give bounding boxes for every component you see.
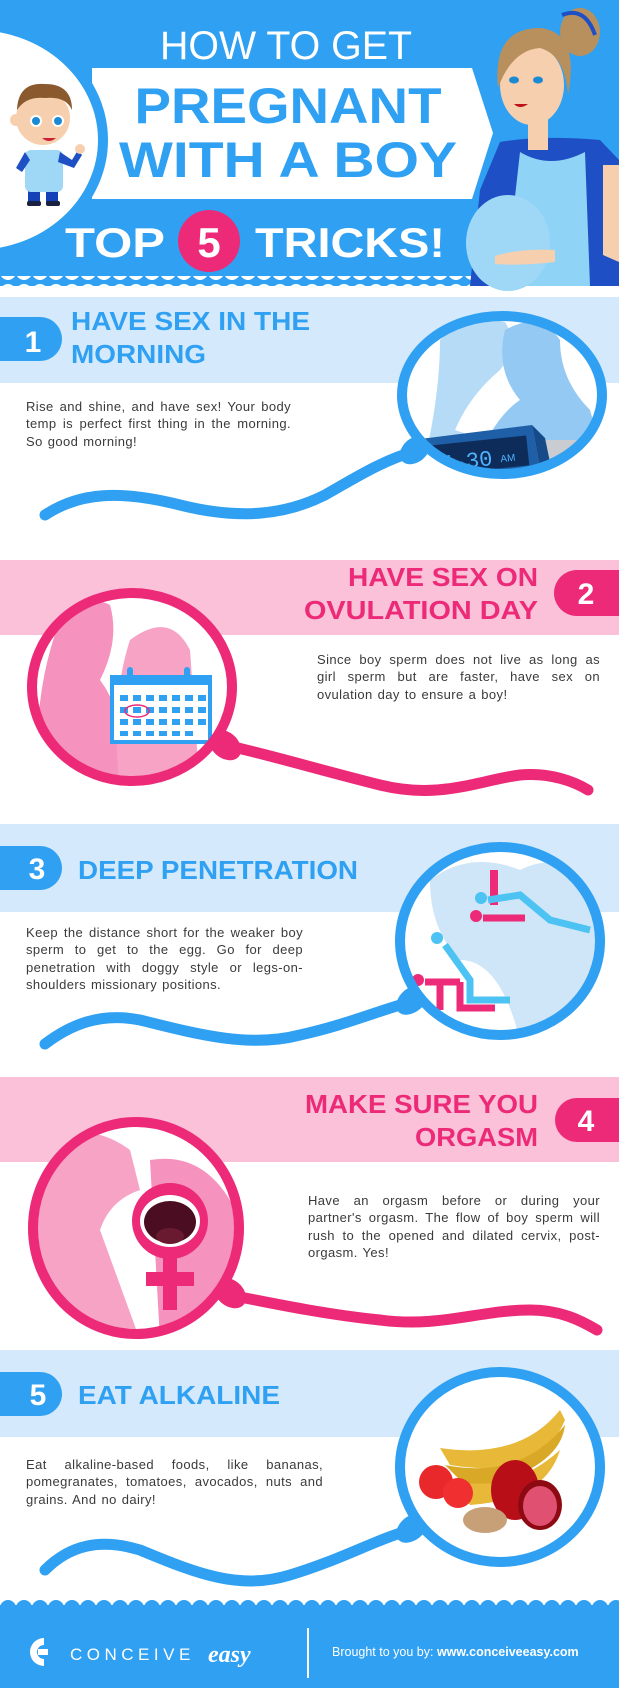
title: WITH A BOY [119,132,457,188]
credit: Brought to you by: www.conceiveeasy.com [332,1645,579,1659]
subtitle: top 5 tricks: 5 [197,219,221,266]
tab: 4 [555,1098,619,1142]
text: section 2 body: Since boy sperm does not live as long as girl sperm but are faster, have sex on ovulation day to ensure a boy! [317,652,600,702]
logo: easy [208,1642,251,1668]
text: section 5 body: Eat alkaline-based foods, like bananas, pomegranates, tomatoes, avocados, nuts and grains. And no dairy! [26,1457,323,1507]
illustration 1: magnifier with clock: AM [500,453,516,465]
heading 4: MAKE SURE YOU [305,1089,538,1119]
icon: pregnant woman [466,8,619,291]
logo [30,1638,251,1668]
tab: 5 [0,1372,62,1416]
text: section 3 body: Keep the distance short for the weaker boy sperm to get to the egg. Go for deep penetration with doggy style or legs-on-shoulders missionary positions. [26,925,303,992]
heading 4 [305,1089,538,1152]
illustration 5: magnifier with fruit [45,1372,600,1581]
section 1 band [0,297,619,383]
tab: 3: 3 [29,853,45,886]
tab: 5: 5 [30,1379,46,1412]
heading 1 [71,306,310,369]
illustration 3: magnifier with positions [45,847,610,1044]
subtitle: top 5 tricks: TOP [65,219,165,266]
illustration 2: magnifier with calendar [32,593,588,790]
heading 2: OVULATION DAY [304,595,538,625]
banner [92,68,493,199]
text: section 4 body: Have an orgasm before or during your partner's orgasm. The flow of boy sperm will rush to the opened and dilated cervix, post-orgasm. Yes! [308,1193,600,1260]
icon: boy [10,84,85,206]
tab: 2: 2 [578,578,594,611]
section 3 band [0,824,619,912]
title [119,24,457,188]
title: PREGNANT [134,78,442,134]
tab: 1: 1 [25,326,41,359]
heading 2: HAVE SEX ON [348,562,538,592]
text: section 1 body: Rise and shine, and have sex! Your body temp is perfect first thing in the morning. So good morning! [26,399,291,449]
white circle with boy [0,30,98,250]
illustration 1: magnifier with clock: 05-30 [426,447,494,479]
illustration 1: magnifier with clock [45,316,610,515]
logo: CONCEIVE [70,1645,195,1664]
header [0,0,619,296]
section 5 band [0,1350,619,1437]
heading 1: HAVE SEX IN THE [71,306,310,336]
subtitle: top 5 tricks [65,210,445,272]
heading 3: DEEP PENETRATION [78,855,358,885]
subtitle: top 5 tricks: TRICKS! [255,219,445,266]
tab: 2 [554,570,619,616]
section 4 band [0,1077,619,1162]
title: HOW TO GET [160,24,412,68]
section 2 band [0,560,619,635]
heading 4: ORGASM [415,1122,538,1152]
tab: 1 [0,317,62,361]
heading 5: EAT ALKALINE [78,1380,280,1410]
tab: 3 [0,846,62,890]
tab: 4: 4 [578,1105,595,1138]
footer [0,1599,619,1688]
heading 2 [304,562,538,625]
heading 1: MORNING [71,339,206,369]
illustration 4: magnifier with female symbol [30,1122,597,1340]
